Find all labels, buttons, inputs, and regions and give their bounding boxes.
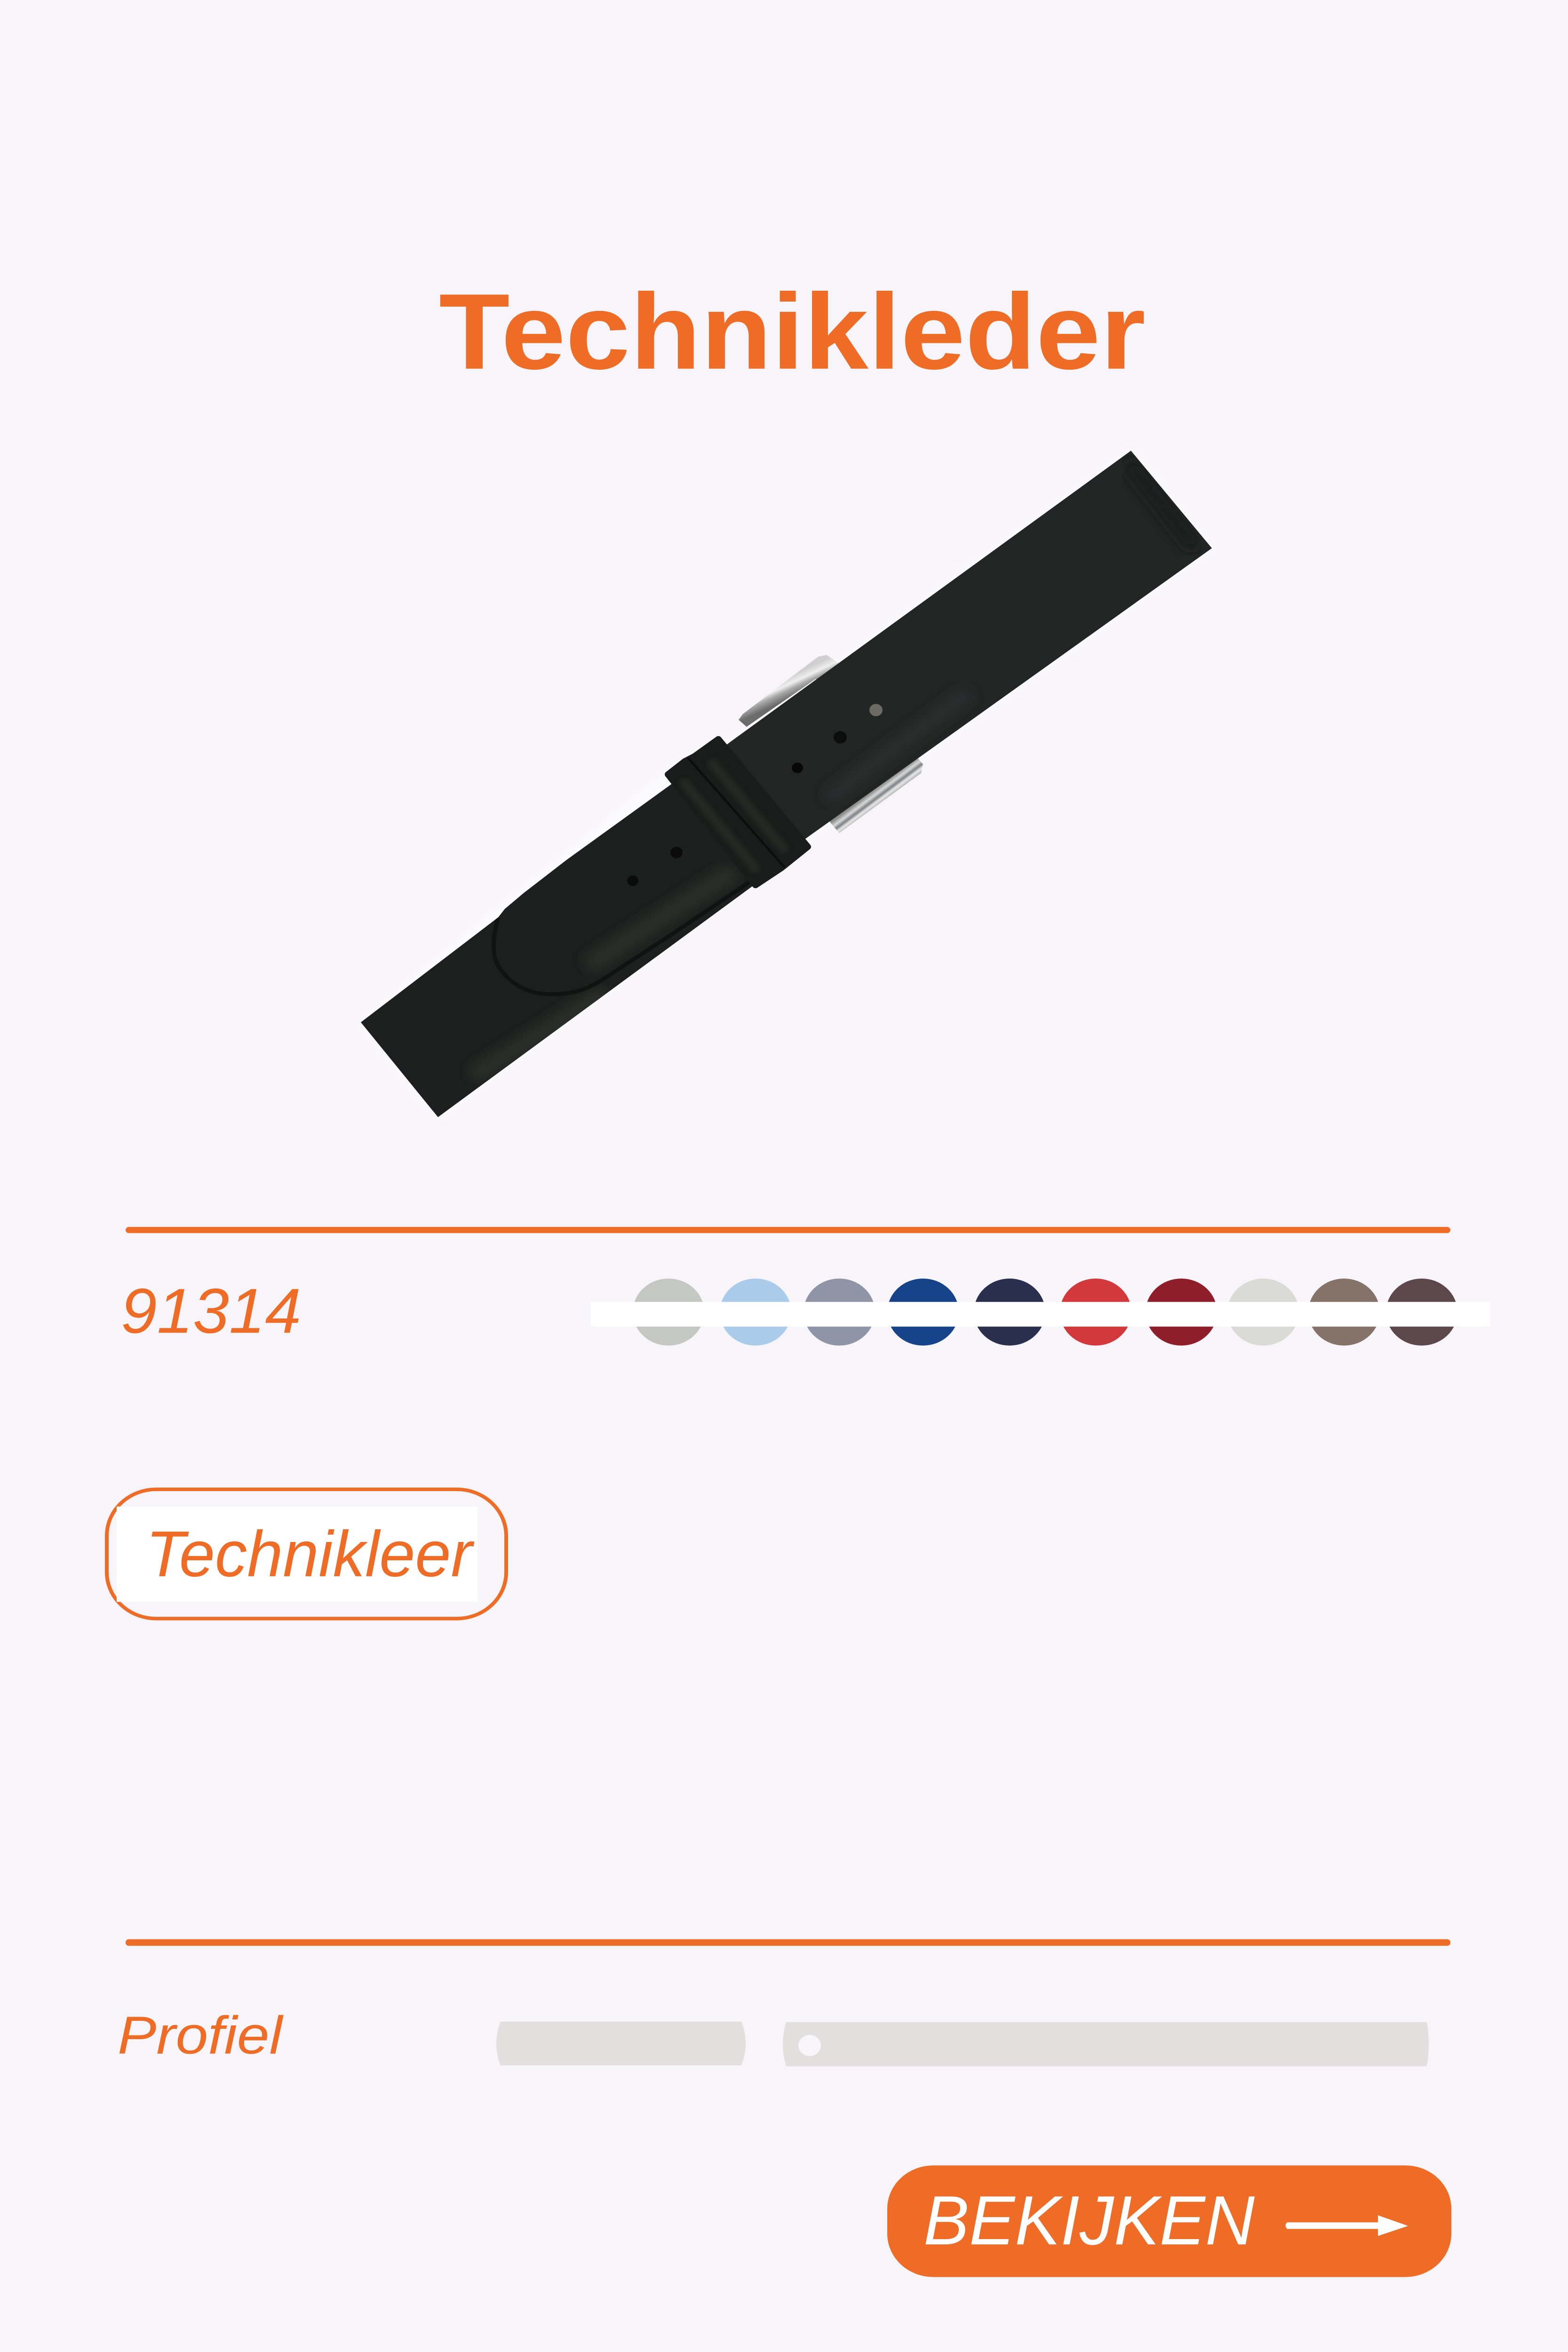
watch strap photo xyxy=(358,441,1223,1120)
strap holes xyxy=(627,704,883,886)
icon: arrow xyxy=(1285,2215,1408,2236)
keeper loops xyxy=(668,739,808,885)
title: Technikleder xyxy=(439,272,1146,392)
buckle bar upper xyxy=(739,655,840,727)
strap upper section xyxy=(727,451,1212,839)
button xyxy=(887,2165,1451,2277)
buckle bar lower xyxy=(828,758,923,833)
profile bar short xyxy=(496,2022,746,2066)
profile label: Profiel xyxy=(118,2005,284,2065)
material tag label: Technikleer xyxy=(146,1518,475,1590)
strap lower section with tongue xyxy=(361,784,753,1117)
colour swatches xyxy=(591,1279,1490,1345)
divider bottom xyxy=(126,1939,1450,1946)
article number: 91314 xyxy=(121,1275,301,1346)
divider top xyxy=(126,1227,1450,1233)
profile bar long xyxy=(783,2022,1429,2066)
button label: BEKIJKEN xyxy=(923,2182,1255,2259)
material tag xyxy=(107,1489,506,1619)
tongue edge xyxy=(493,880,753,994)
white band across swatches xyxy=(591,1302,1490,1327)
